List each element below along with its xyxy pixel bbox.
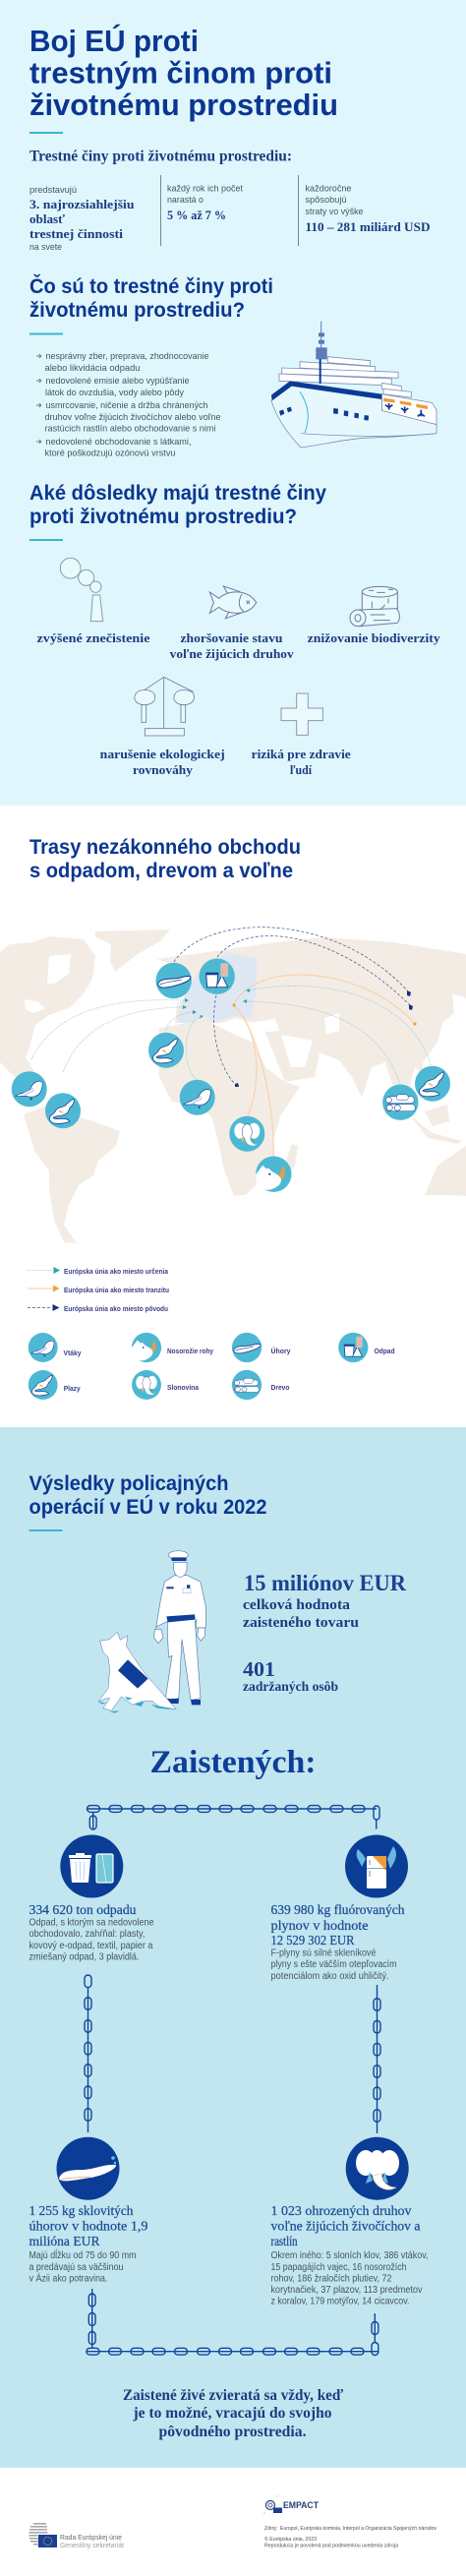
heading: consequences: proti životnému prostrediu? (29, 505, 297, 528)
consequence labels: zhoršovanie stavu (181, 630, 283, 645)
logo: Council of the EU: Rada Európskej únie (60, 2533, 122, 2542)
text: fluorinated gases: F-plyny sú silné skleníkové (271, 1947, 377, 1959)
logo: Council of the EU (29, 2523, 125, 2549)
icon: health cross (281, 693, 322, 735)
heading: consequences: Aké dôsledky majú trestné činy (29, 481, 326, 505)
panel: intro (0, 0, 466, 806)
consequence labels: znižovanie biodiverzity (308, 630, 440, 645)
title (29, 23, 338, 122)
panel: police results (0, 1427, 466, 2468)
icon: balance with trees (135, 677, 194, 736)
text: fluorinated gases: 639 980 kg fluórovaných (271, 1903, 405, 1918)
heading: what are crimes: životnému prostrediu? (29, 298, 245, 322)
legend: routes: Európska únia ako miesto pôvodu (64, 1306, 168, 1313)
subheading: Trestné činy proti životnému prostrediu: (29, 148, 292, 165)
list of crimes: druhov voľne žijúcich živočíchov alebo voľne (45, 412, 220, 422)
stat: yearly losses: 110 – 281 miliárd USD (305, 219, 431, 234)
icon: eel circle (57, 2137, 120, 2200)
stats: arrests (243, 1657, 338, 1695)
stat: yearly losses: každoročne (305, 183, 352, 195)
text: endangered species: 15 papagájích vajec, 16 nosorožích (271, 2262, 407, 2273)
stat: yearly growth: narastá o (167, 195, 204, 206)
text: waste: zmiešaný odpad, 3 plavidlá. (29, 1951, 140, 1963)
title: životnému prostrediu (29, 88, 338, 122)
text: endangered species: rastlín (271, 2235, 297, 2249)
text: waste: 334 620 ton odpadu (29, 1903, 136, 1918)
icon: waste circle (60, 1835, 123, 1898)
panel: footer (0, 2468, 466, 2576)
consequence labels: voľne žijúcich druhov (170, 646, 294, 661)
logo: EMPACT: EMPACT (283, 2500, 319, 2510)
stats: arrests: 401 (243, 1657, 275, 1681)
icon: factory smoke (60, 558, 103, 622)
text: eels: v Ázii ako potravina. (29, 2274, 108, 2284)
text: endangered species: voľne žijúcich živočíchov a (271, 2219, 421, 2235)
list of crimes (36, 351, 220, 458)
title: trestným činom proti (29, 55, 332, 90)
icon: fridge circle (345, 1835, 408, 1898)
stats: value seized: zaisteného tovaru (243, 1615, 359, 1631)
heading: what are crimes: Čo sú to trestné činy proti (29, 273, 273, 298)
stat: third largest crime area: 3. najrozsiahlejšiu (29, 197, 134, 211)
text: eels: a predávajú sa väčšinou (29, 2262, 124, 2273)
source and copyright: © Európska únia, 2023 (264, 2536, 317, 2543)
stat: yearly losses: straty vo výške (305, 207, 364, 217)
legend: routes: Európska únia ako miesto určenia (64, 1269, 168, 1276)
text: waste: obchodovalo, zahŕňal: plasty, (29, 1929, 146, 1940)
list of crimes: nedovolené obchodovanie s látkami, (45, 437, 191, 447)
illustration: officer (154, 1551, 205, 1705)
legend: routes: Európska únia ako miesto tranzitu (64, 1288, 169, 1294)
world map (0, 928, 466, 1243)
stat: third largest crime area: trestnej činnosti (29, 226, 123, 241)
source and copyright (264, 2526, 437, 2549)
list of crimes: látok do ovzdušia, vody alebo pôdy (45, 388, 184, 397)
closing statement (123, 2387, 344, 2440)
list of crimes: alebo likvidácia odpadu (45, 363, 140, 373)
text: endangered species: Okrem iného: 5 sloních klov, 386 vtákov, (271, 2250, 429, 2261)
text: eels: úhorov v hodnote 1,9 (29, 2219, 147, 2235)
chain bottom (87, 2289, 379, 2355)
stat: third largest crime area (29, 185, 134, 253)
text: eels: 1 255 kg sklovitých (29, 2204, 134, 2219)
text: endangered species: 1 023 ohrozených druhov (271, 2204, 411, 2219)
stats: value seized: 15 miliónov EUR (244, 1571, 406, 1595)
text: waste: kovový e-odpad, textil, papier a (29, 1941, 153, 1951)
heading: results: Výsledky policajných (29, 1472, 228, 1495)
text: waste (29, 1903, 154, 1963)
heading: results (29, 1472, 267, 1519)
stat: yearly growth: každý rok ich počet (167, 183, 243, 195)
panel: trade routes (0, 806, 466, 1427)
text: fluorinated gases: plyny s ešte väčším otepľovacím (271, 1959, 397, 1970)
legend: goods: Drevo (271, 1385, 289, 1392)
heading: seized: Zaistených: (149, 1745, 317, 1780)
icon: fish (209, 586, 257, 619)
title: Boj EÚ proti (29, 23, 199, 58)
legend: routes (28, 1267, 169, 1313)
text: eels: milióna EUR (29, 2235, 100, 2249)
heading: what are crimes (29, 273, 273, 322)
route lines (31, 928, 431, 1158)
text: endangered species: korytnačiek, 37 plazov, 113 predmetov (271, 2285, 423, 2296)
text: endangered species (271, 2204, 429, 2307)
consequence labels (37, 630, 440, 777)
stat: third largest crime area: oblasť (29, 211, 65, 226)
text: endangered species: rohov, 186 žraločích plutiev, 72 (271, 2274, 391, 2284)
map icons (12, 958, 450, 1192)
stat: yearly growth (167, 183, 243, 222)
legend: goods: Odpad (374, 1348, 395, 1355)
text: fluorinated gases: 12 529 302 EUR (271, 1934, 355, 1948)
text: fluorinated gases (271, 1903, 405, 1982)
consequence labels: rovnováhy (133, 762, 194, 777)
chain top (87, 1806, 379, 1829)
text: endangered species: z koralov, 179 motýľov, 14 cicavcov. (271, 2296, 409, 2307)
text: eels: Majú dĺžku od 75 do 90 mm (29, 2249, 136, 2261)
list of crimes: nedovolené emisie alebo vypúšťanie (45, 376, 189, 386)
legend: goods: Nosorožie rohy (167, 1348, 213, 1355)
closing statement: pôvodného prostredia. (159, 2424, 307, 2440)
legend: goods: Vtáky (63, 1350, 82, 1357)
stat: yearly growth: 5 % až 7 % (167, 208, 226, 222)
stats: value seized: celková hodnota (243, 1597, 351, 1613)
stats: arrests: zadržaných osôb (243, 1680, 338, 1695)
source and copyright: Zdroj: Europol, Európska komisia, Interpol a Organizácia Spojených národov (264, 2526, 437, 2532)
consequence labels: riziká pre zdravie (252, 747, 351, 761)
stats: value seized (243, 1571, 406, 1631)
legend: goods: Slonovina (167, 1385, 199, 1392)
chain right (374, 1985, 380, 2133)
stat: yearly losses: spôsobujú (305, 195, 346, 206)
list of crimes: usmrcovanie, ničenie a držba chránených (45, 400, 208, 410)
stat: yearly losses (305, 183, 431, 234)
heading: routes: Trasy nezákonného obchodu (29, 836, 301, 859)
text: eels (29, 2204, 147, 2284)
heading: routes (29, 836, 301, 882)
text: fluorinated gases: plynov v hodnote (271, 1919, 368, 1934)
stat: third largest crime area: na svete (29, 242, 62, 253)
legend: goods: Plazy (64, 1386, 81, 1393)
icon: container ship (271, 322, 437, 448)
icon: tree stump and log (350, 586, 399, 627)
list of crimes: ktoré poškodzujú ozónovú vrstvu (45, 449, 175, 458)
illustration: dog (98, 1632, 176, 1713)
consequence labels: ľudí (290, 762, 312, 777)
stat: third largest crime area: predstavujú (29, 185, 77, 196)
text: waste: Odpad, s ktorým sa nedovolene (29, 1918, 154, 1928)
logo: EMPACT (263, 2495, 319, 2514)
closing statement: Zaistené živé zvieratá sa vždy, keď (123, 2387, 344, 2404)
heading: consequences (29, 481, 326, 528)
logo: Council of the EU: Generálny sekretariát (60, 2541, 125, 2549)
legend: goods: Úhory (271, 1347, 291, 1355)
list of crimes: nesprávny zber, preprava, zhodnocovanie (45, 351, 208, 361)
text: fluorinated gases: potenciálom ako oxid uhličitý. (271, 1971, 389, 1982)
icon: elephant circle (346, 2137, 409, 2200)
heading: routes: s odpadom, drevom a voľne (29, 860, 293, 882)
closing statement: je to možné, vracajú do svojho (132, 2405, 332, 2422)
consequence labels: narušenie ekologickej (100, 747, 225, 761)
heading: results: operácií v EÚ v roku 2022 (29, 1495, 267, 1519)
chain left (85, 1975, 91, 2132)
legend: goods (29, 1333, 394, 1400)
consequence labels: zvýšené znečistenie (37, 630, 150, 645)
list of crimes: rastúcich rastlín alebo obchodovanie s nimi (45, 423, 216, 433)
source and copyright: Reprodukcia je povolená pod podmienkou uvedenia zdroja (264, 2544, 398, 2549)
